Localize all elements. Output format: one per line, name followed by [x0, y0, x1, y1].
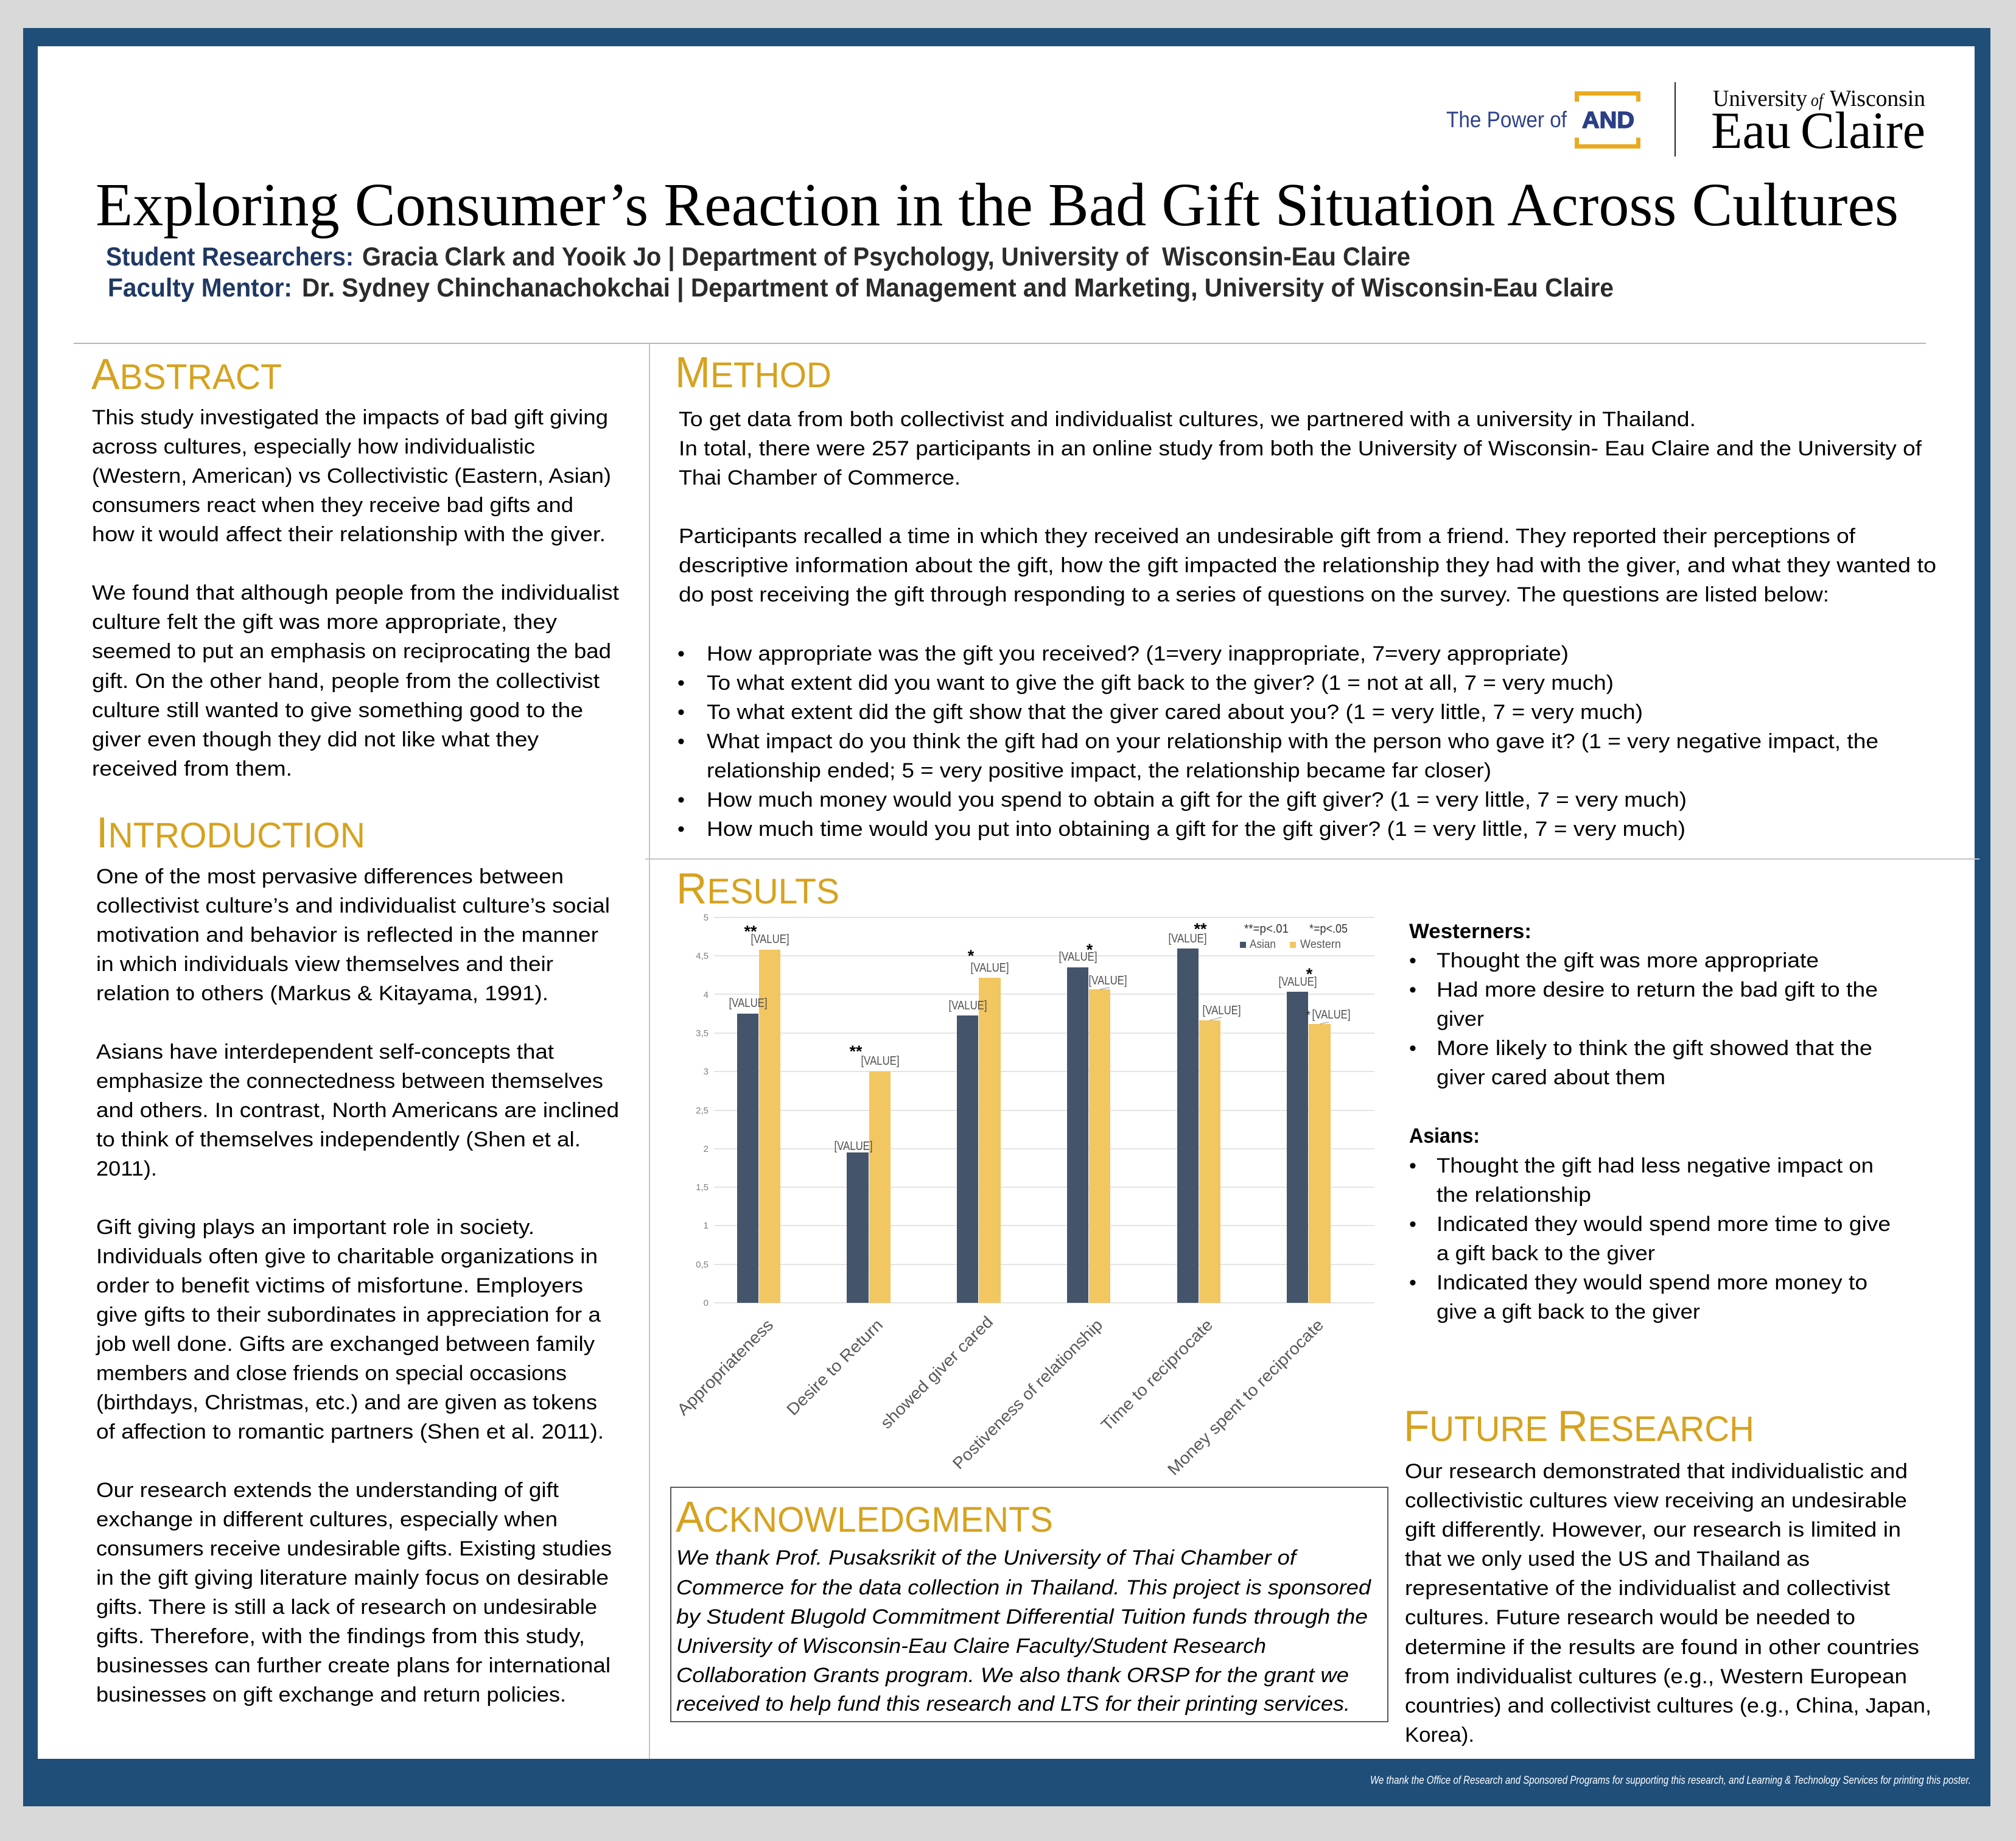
text: future research body: cultures. Future research would be needed to [1405, 1606, 1855, 1629]
list: survey questions: How much money would you spend to obtain a gift for the gift giver? (1 = very little, 7 = very much) [707, 788, 1687, 812]
text: introduction body: One of the most pervasive differences between [96, 865, 564, 888]
panel: method [675, 349, 1936, 841]
list: survey questions: • [677, 818, 685, 841]
x axis labels: Money spent to reciprocate [1164, 1316, 1327, 1479]
panel: future research [1404, 1403, 1931, 1747]
text: future research body: that we only used the US and Thailand as [1405, 1548, 1810, 1571]
authors: faculty mentor: Faculty Mentor: [108, 273, 292, 303]
text: acknowledgments body: Collaboration Grants program. We also thank ORSP for the grant we [676, 1664, 1349, 1687]
data labels [729, 932, 1350, 1153]
text: results summary for Asians: • [1409, 1271, 1416, 1294]
heading: abstract: ABSTRACT [91, 351, 282, 399]
text: future research body: Korea). [1405, 1724, 1474, 1747]
y axis labels [696, 913, 709, 1308]
y axis labels: 2 [704, 1144, 709, 1154]
list: survey questions: To what extent did you want to give the gift back to the giver? (1 = not at all, 7 = very much) [707, 672, 1614, 695]
significance stars: ** [1194, 920, 1207, 938]
text: results summary for Asians: a gift back to the giver [1437, 1242, 1655, 1265]
text: abstract body: We found that although people from the individualist [92, 581, 620, 605]
title: Exploring Consumer’s Reaction in the Bad Gift Situation Across Cultures [96, 170, 1899, 239]
data labels: [VALUE] [861, 1054, 900, 1068]
text: results summary for Asians [1409, 1124, 1891, 1324]
text: introduction body: businesses can further create plans for international [96, 1654, 611, 1677]
text: future research body [1405, 1460, 1931, 1747]
legend [1240, 922, 1348, 951]
text: future research body: gift differently. However, our research is limited in [1405, 1518, 1901, 1541]
heading: method: METHOD [675, 349, 831, 397]
bars: Western [759, 950, 1331, 1303]
list: survey questions: • [677, 642, 685, 665]
list: survey questions: • [677, 701, 685, 724]
data labels: [VALUE] [1169, 932, 1206, 945]
text: results summary for Westerners: giver cared about them [1437, 1066, 1665, 1089]
authors: student researchers: Student Researchers: [106, 242, 354, 272]
text: introduction body: and others. In contrast, North Americans are inclined [96, 1099, 619, 1122]
text: acknowledgments body: Commerce for the data collection in Thailand. This project is sponsored [676, 1576, 1371, 1599]
text: method description: To get data from both collectivist and individualist cultures, we partnered with a university in Thailand. [679, 408, 1696, 431]
text: introduction body: businesses on gift exchange and return policies. [96, 1683, 566, 1706]
data labels: [VALUE] [1278, 975, 1317, 989]
logo: University of Wisconsin Eau Claire: Eau [1711, 101, 1791, 160]
text: introduction body: consumers receive undesirable gifts. Existing studies [96, 1537, 612, 1560]
y axis labels: 4,5 [696, 951, 709, 961]
text: introduction body: (birthdays, Christmas, etc.) and are given as tokens [96, 1391, 597, 1414]
text: introduction body: emphasize the connectedness between themselves [96, 1070, 603, 1093]
legend: Asian [1250, 938, 1276, 951]
text: future research body: countries) and collectivist cultures (e.g., China, Japan, [1405, 1694, 1931, 1717]
text: future research body: determine if the results are found in other countries [1405, 1636, 1919, 1659]
y axis labels: 2,5 [696, 1106, 709, 1116]
text: abstract body: giver even though they did not like what they [92, 728, 539, 751]
text: method description [679, 408, 1936, 606]
y axis labels: 1 [704, 1221, 709, 1231]
text: introduction body: of affection to romantic partners (Shen et al. 2011). [96, 1420, 604, 1443]
list: survey questions: To what extent did the gift show that the giver cared about you? (1 = very little, 7 = very much) [707, 701, 1643, 724]
y axis labels: 4 [704, 990, 709, 1000]
text: acknowledgments body: by Student Blugold Commitment Differential Tuition funds through the [676, 1605, 1368, 1629]
text: results summary for Westerners [1409, 920, 1878, 1089]
significance stars: * [1306, 1009, 1311, 1022]
legend: *=p<.05 [1309, 922, 1348, 936]
bars: Asian [737, 949, 1308, 1303]
y axis labels: 0 [704, 1298, 709, 1308]
bar chart: Asian vs Western means [674, 913, 1374, 1479]
text: results summary for Asians: give a gift back to the giver [1437, 1300, 1700, 1324]
legend: Western [1300, 938, 1341, 951]
text: method description: In total, there were 257 participants in an online study from both the University of Wisconsin- Eau Claire and the University of [679, 437, 1922, 460]
text: method description: do post receiving the gift through responding to a series of questions on the survey. The questions are listed below: [679, 583, 1829, 606]
text: future research body: representative of the individualist and collectivist [1405, 1577, 1891, 1600]
data labels: [VALUE] [1088, 974, 1127, 987]
text: results summary for Westerners: • [1409, 949, 1416, 972]
text: introduction body: in the gift giving literature mainly focus on desirable [96, 1566, 609, 1590]
y axis labels: 3,5 [696, 1028, 709, 1039]
authors: faculty mentor: Dr. Sydney Chinchanachokchai | Department of Management and Marketing, University of Wisconsin-Eau Claire [302, 273, 1614, 303]
x axis labels: Appropriateness [674, 1316, 777, 1419]
logo: The Power of AND [1446, 91, 1640, 149]
list: survey questions: • [677, 672, 685, 695]
data labels: [VALUE] [1312, 1008, 1350, 1022]
data labels: [VALUE] [751, 933, 789, 946]
logo: University of Wisconsin Eau Claire: Claire [1801, 101, 1925, 160]
text: results summary for Asians: Thought the gift had less negative impact on [1437, 1154, 1874, 1177]
text: introduction body: Our research extends the understanding of gift [96, 1479, 559, 1502]
text: results summary for Asians: • [1409, 1213, 1416, 1236]
logo: University of Wisconsin Eau Claire: University [1713, 86, 1807, 111]
text: abstract body: how it would affect their relationship with the giver. [92, 523, 606, 546]
text: results summary for Westerners: • [1409, 1037, 1416, 1060]
y axis labels: 3 [704, 1067, 709, 1077]
text: introduction body: order to benefit victims of misfortune. Employers [96, 1274, 583, 1297]
text: results summary for Westerners: Thought the gift was more appropriate [1437, 949, 1819, 972]
significance stars [744, 920, 1313, 1061]
data labels: [VALUE] [1059, 950, 1097, 964]
text: method description: descriptive information about the gift, how the gift impacted the relationship they had with the giver, and what they wanted to [679, 554, 1936, 577]
y axis labels: 5 [704, 913, 709, 923]
text: method description: Thai Chamber of Commerce. [679, 466, 961, 489]
text: acknowledgments body [676, 1546, 1371, 1716]
text: abstract body: culture still wanted to give something good to the [92, 699, 583, 722]
text: introduction body: Gift giving plays an important role in society. [96, 1216, 534, 1239]
logo: University of Wisconsin Eau Claire: Wisconsin [1830, 86, 1925, 111]
text: introduction body: Asians have interdependent self-concepts that [96, 1040, 555, 1064]
logo: University of Wisconsin Eau Claire: of [1811, 90, 1825, 110]
significance stars: * [1087, 941, 1093, 959]
text: introduction body: give gifts to their subordinates in appreciation for a [96, 1303, 601, 1327]
text: introduction body: relation to others (Markus & Kitayama, 1991). [96, 982, 548, 1005]
heading: future research: FUTURE RESEARCH [1404, 1403, 1754, 1451]
logo: The Power of AND: AND [1582, 108, 1634, 133]
panel: introduction [96, 809, 619, 1706]
text: introduction body [96, 865, 619, 1706]
text: introduction body: members and close friends on special occasions [96, 1362, 567, 1385]
text: results summary for Asians: Indicated they would spend more time to give [1437, 1213, 1891, 1236]
data labels: [VALUE] [948, 999, 987, 1012]
text: abstract body: received from them. [92, 757, 292, 780]
text: introduction body: gifts. There is still a lack of research on undesirable [96, 1596, 597, 1619]
text: results summary for Asians: the relationship [1437, 1184, 1591, 1207]
text: acknowledgments body: We thank Prof. Pusaksrikit of the University of Thai Chamber of [676, 1546, 1298, 1569]
legend: **=p<.01 [1244, 922, 1289, 936]
list: survey questions: What impact do you think the gift had on your relationship with the person who gave it? (1 = very negative impact, the [707, 730, 1878, 753]
text: introduction body: motivation and behavior is reflected in the manner [96, 924, 598, 947]
x axis labels [674, 1313, 1327, 1479]
data labels: [VALUE] [970, 961, 1009, 975]
text: acknowledgments body: University of Wisconsin-Eau Claire Faculty/Student Research [676, 1635, 1266, 1658]
data labels: [VALUE] [1203, 1004, 1241, 1017]
text: abstract body [92, 406, 620, 780]
heading: introduction: INTRODUCTION [96, 809, 365, 857]
x axis labels: Desire to Return [783, 1316, 886, 1419]
panel: acknowledgments [671, 1487, 1388, 1722]
text: results summary for Asians: Indicated they would spend more money to [1437, 1271, 1867, 1294]
text: abstract body: This study investigated the impacts of bad gift giving [92, 406, 608, 429]
text: results summary for Asians: Asians: [1409, 1124, 1480, 1148]
text: introduction body: job well done. Gifts are exchanged between family [96, 1333, 595, 1356]
list: survey questions: • [677, 730, 685, 753]
heading: results: RESULTS [676, 865, 839, 913]
list: survey questions: How appropriate was the gift you received? (1=very inappropriate, 7=very appropriate) [707, 642, 1569, 665]
data labels: [VALUE] [834, 1140, 873, 1153]
text: introduction body: exchange in different cultures, especially when [96, 1508, 558, 1531]
text: abstract body: (Western, American) vs Collectivistic (Eastern, Asian) [92, 465, 611, 488]
text: introduction body: gifts. Therefore, with the findings from this study, [96, 1625, 585, 1648]
x axis labels: Time to reciprocate [1097, 1316, 1216, 1434]
list: survey questions: relationship ended; 5 = very positive impact, the relationship became far closer) [707, 759, 1491, 782]
text: introduction body: in which individuals view themselves and their [96, 953, 553, 976]
text: introduction body: Individuals often give to charitable organizations in [96, 1245, 598, 1268]
significance stars: * [968, 947, 975, 965]
text: introduction body: collectivist culture’s and individualist culture’s social [96, 894, 610, 917]
logo: University of Wisconsin Eau Claire [1711, 86, 1925, 160]
list: survey questions [677, 642, 1878, 841]
text: introduction body: 2011). [96, 1157, 157, 1180]
significance stars: ** [744, 922, 757, 941]
text: results summary for Westerners: Had more desire to return the bad gift to the [1437, 978, 1878, 1001]
text: future research body: from individualist cultures (e.g., Western European [1405, 1665, 1907, 1688]
authors: student researchers: Gracia Clark and Yooik Jo | Department of Psychology, University of Wisconsin-Eau Claire [362, 242, 1410, 272]
text: abstract body: consumers react when they receive bad gifts and [92, 494, 573, 517]
leader lines [1100, 987, 1329, 1024]
x axis labels: showed giver cared [877, 1313, 996, 1432]
text: abstract body: across cultures, especially how individualistic [92, 435, 535, 458]
text: results summary for Westerners: giver [1437, 1008, 1484, 1031]
x axis labels: Postiveness of relationship [949, 1316, 1106, 1473]
y axis labels: 1,5 [696, 1182, 709, 1193]
panel: abstract [91, 351, 620, 780]
text: future research body: collectivistic cultures view receiving an undesirable [1405, 1489, 1907, 1512]
panel: results [674, 865, 1891, 1479]
text: method description: Participants recalled a time in which they received an undesirable gift from a friend. They reported their perceptions of [679, 525, 1856, 548]
text: abstract body: seemed to put an emphasis on reciprocating the bad [92, 640, 611, 663]
y axis labels: 0,5 [696, 1260, 709, 1270]
heading: acknowledgments: ACKNOWLEDGMENTS [676, 1493, 1053, 1541]
text: abstract body: gift. On the other hand, people from the collectivist [92, 670, 600, 693]
significance stars: ** [849, 1042, 863, 1061]
data labels: [VALUE] [729, 997, 767, 1010]
significance stars: * [1306, 965, 1313, 983]
list: survey questions: How much time would you put into obtaining a gift for the gift giver? (1 = very little, 7 = very much) [707, 818, 1685, 841]
text: results summary for Westerners: Westerners: [1409, 920, 1531, 943]
text: abstract body: culture felt the gift was more appropriate, they [92, 611, 557, 634]
list: survey questions: • [677, 788, 685, 812]
text: acknowledgments body: received to help fund this research and LTS for their printing services. [676, 1692, 1350, 1716]
text: results summary for Asians: • [1409, 1154, 1416, 1177]
text: results summary for Westerners: More likely to think the gift showed that the [1437, 1037, 1872, 1060]
text: results summary for Westerners: • [1409, 978, 1416, 1001]
text: future research body: Our research demonstrated that individualistic and [1405, 1460, 1908, 1483]
text: introduction body: to think of themselves independently (Shen et al. [96, 1128, 581, 1151]
logo: The Power of AND: The Power of [1446, 107, 1567, 132]
